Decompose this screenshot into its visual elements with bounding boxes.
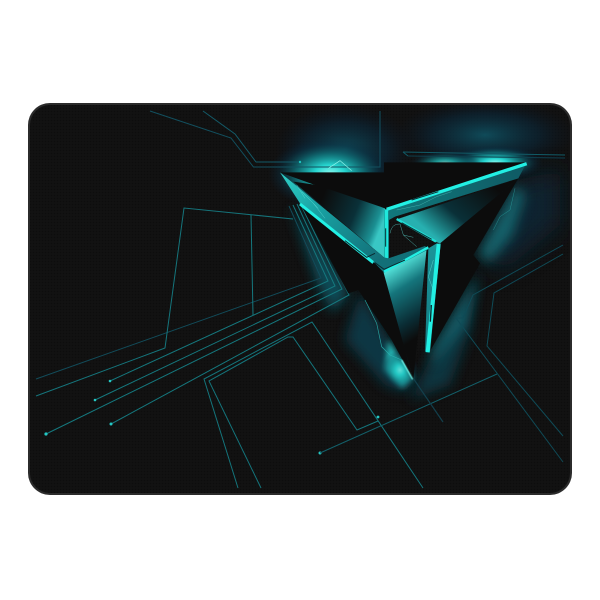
logo	[280, 161, 527, 380]
circuit lines	[36, 111, 565, 488]
top right lines	[403, 152, 565, 158]
right side glow	[478, 185, 525, 262]
top left circuit lines	[150, 111, 380, 167]
mat surface	[30, 105, 570, 493]
lightning: lower left	[365, 300, 402, 360]
logo: inner bar highlight	[397, 219, 436, 242]
logo: right black shape	[431, 178, 518, 350]
lightning: top	[328, 161, 352, 171]
lightning: right side	[493, 188, 515, 230]
logo: top right bar	[384, 162, 527, 258]
mat base with rim	[28, 103, 572, 495]
artwork clipped to mat	[36, 99, 575, 488]
line end dots	[44, 380, 379, 454]
logo: left bar	[280, 172, 388, 263]
logo: top black shape	[280, 162, 527, 210]
mouse pad illustration	[28, 103, 572, 495]
logo: center lightning	[390, 224, 417, 247]
logo: right vertical bar	[425, 243, 441, 352]
left converging lines	[36, 203, 349, 434]
logo tip fade line	[413, 378, 443, 422]
logo: connector bar	[373, 246, 428, 273]
top right glow	[458, 148, 538, 176]
lower left lines	[204, 322, 423, 488]
lower right glow	[432, 275, 478, 365]
logo: lower gradient wedge	[383, 248, 427, 380]
top left glow	[273, 146, 384, 206]
tip highlight	[402, 360, 413, 379]
logo: upper left gradient wedge	[293, 182, 385, 257]
bottom tip glow	[385, 340, 413, 388]
lower horizontal line	[320, 374, 497, 453]
logo: lower black shape	[300, 203, 413, 380]
dim glow haze	[275, 99, 575, 400]
right side lines	[456, 245, 563, 462]
logo: upper right gradient wedge	[397, 178, 518, 243]
